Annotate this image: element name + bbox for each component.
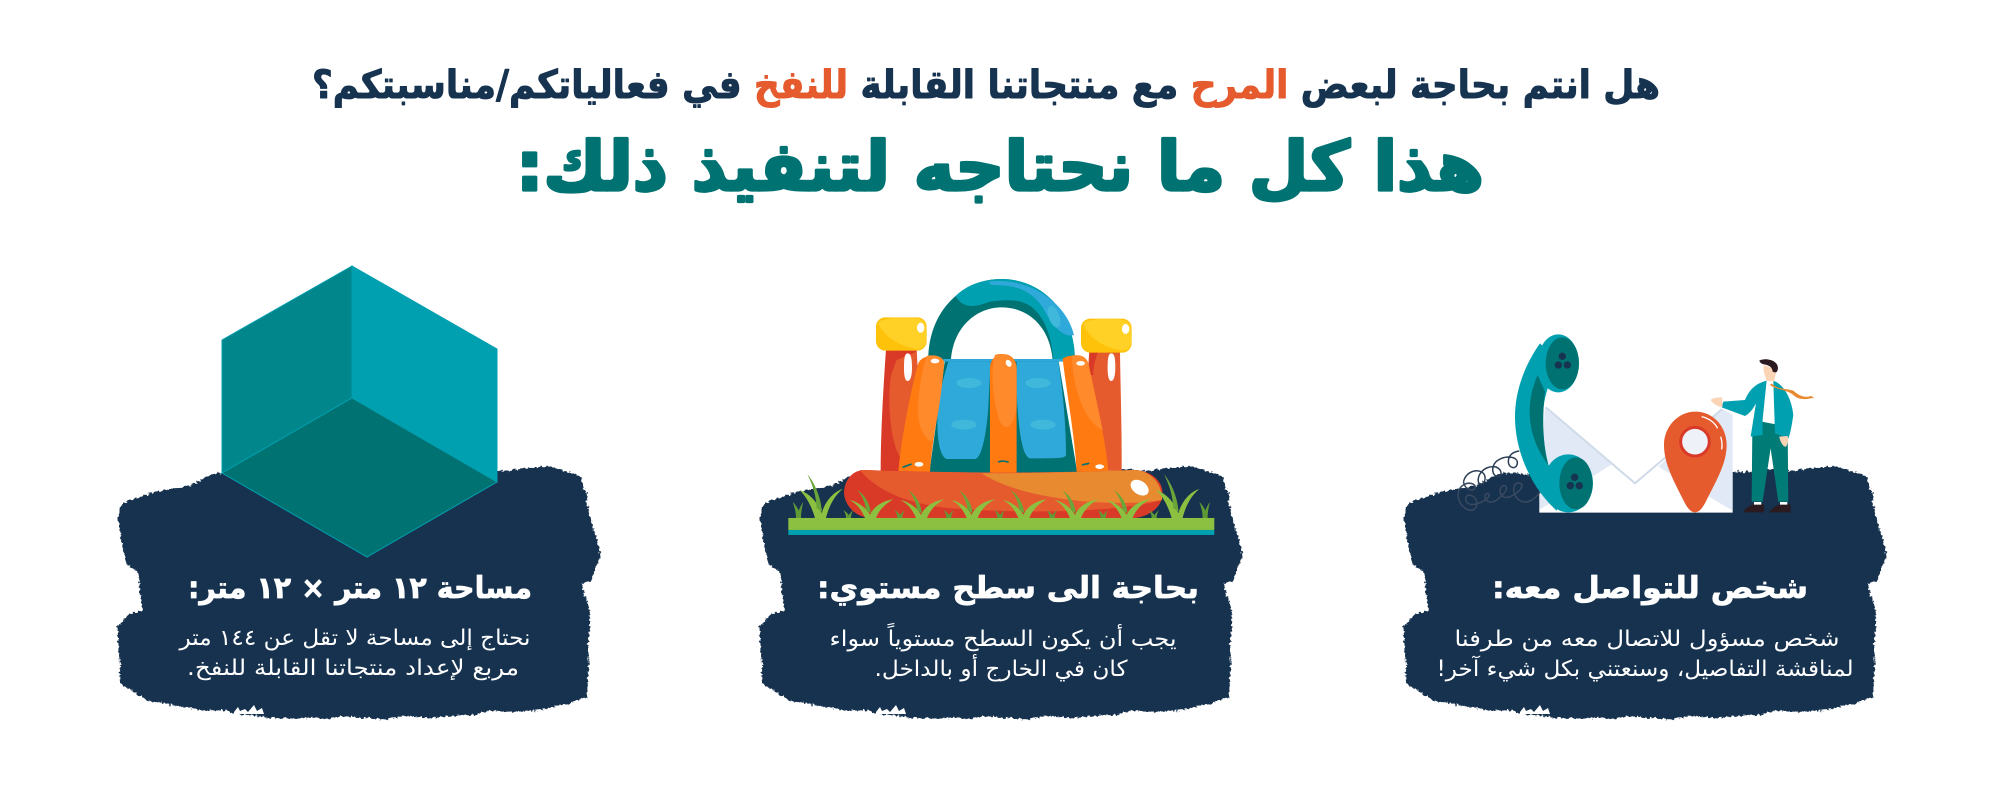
main title: هذا كل ما نحتاجه لتنفيذ ذلك: <box>516 128 1484 207</box>
text: surface line 1: يجب أن يكون السطح مستوياً سواء <box>830 622 1176 652</box>
icon: isometric cube corner <box>222 266 497 557</box>
brush background: surface <box>760 466 1242 718</box>
heading: contact: شخص للتواصل معه: <box>1492 571 1808 606</box>
heading: space: مساحة ١٢ متر × ١٢ متر: <box>188 571 532 606</box>
text: contact line 1: شخص مسؤول للاتصال معه من طرفنا <box>1454 627 1840 652</box>
icon: phone, envelope, pin and person <box>1458 334 1814 513</box>
brush background: space <box>118 466 600 718</box>
heading: surface: بحاجة الى سطح مستوي: <box>817 571 1199 606</box>
text: surface line 2: كان في الخارج أو بالداخل. <box>874 654 1128 682</box>
text: space line 1: نحتاج إلى مساحة لا تقل عن ١٤٤ متر <box>178 626 530 651</box>
grass tufts <box>793 474 1210 518</box>
panel: space <box>118 266 600 718</box>
text: contact line 2: لمناقشة التفاصيل، وسنعتني بكل شيء آخر! <box>1436 655 1854 682</box>
brush background: contact <box>1404 466 1886 718</box>
question heading: هل انتم بحاجة لبعض المرح مع منتجاتنا القابلة للنفخ في فعالياتكم/مناسبتكم؟ <box>312 63 1660 108</box>
icon: inflatable bouncer <box>788 279 1214 535</box>
panel: contact person <box>1404 334 1886 718</box>
panel: flat surface <box>760 279 1242 718</box>
text: space line 2: مربع لإعداد منتجاتنا القابلة للنفخ. <box>187 656 519 681</box>
